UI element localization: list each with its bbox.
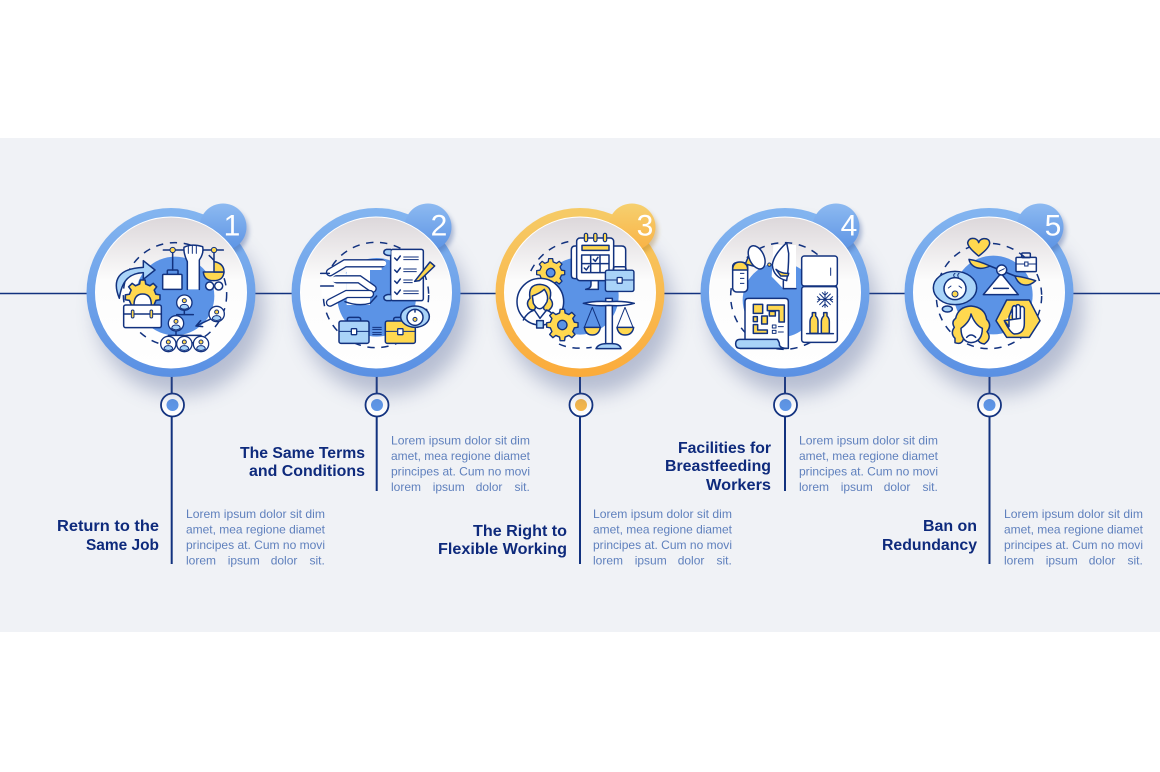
- text block 1: principes at. Cum no movi: [186, 538, 325, 552]
- icon: job return and hierarchy: [116, 243, 227, 352]
- text block 3: principes at. Cum no movi: [593, 538, 732, 552]
- text block 4: [799, 434, 939, 494]
- connector and node 4: [774, 370, 797, 491]
- text block 4: ipsum: [841, 480, 873, 494]
- text block 2: ipsum: [433, 480, 465, 494]
- heading 5: Redundancy: [882, 537, 977, 554]
- icon: breast pump, plan and fridge: [731, 243, 837, 349]
- text block 5: lorem: [1004, 554, 1034, 568]
- text block 2: [391, 434, 531, 494]
- heading 1: [57, 518, 159, 554]
- circle badge 5: 5: [1045, 210, 1061, 242]
- text block 1: dolor: [271, 554, 297, 568]
- text block 3: amet, mea regione diamet: [593, 522, 733, 536]
- text block 1: [186, 507, 326, 568]
- text block 1: amet, mea regione diamet: [186, 522, 326, 536]
- text block 4: principes at. Cum no movi: [799, 464, 938, 478]
- circle badge 2: 2: [431, 210, 447, 242]
- circle badge 1: 1: [224, 210, 240, 242]
- heading 3: [438, 523, 567, 558]
- text block 2: lorem: [391, 480, 421, 494]
- text block 4: dolor: [884, 480, 910, 494]
- connector and node 3: [570, 370, 592, 564]
- heading 1: Return to the: [57, 518, 159, 535]
- text block 1: ipsum: [228, 554, 260, 568]
- connector and node 1: [161, 370, 184, 564]
- heading 4: Breastfeeding: [665, 458, 771, 475]
- heading 4: Workers: [706, 477, 771, 494]
- text block 5: sit.: [1128, 554, 1143, 568]
- heading 2: [240, 445, 365, 480]
- timeline axis: [0, 292, 1160, 294]
- step 1: return to the same job: [57, 204, 326, 568]
- text block 5: [1004, 507, 1144, 568]
- text block 5: Lorem ipsum dolor sit dim: [1004, 507, 1143, 521]
- heading 5: Ban on: [923, 518, 977, 535]
- text block 4: amet, mea regione diamet: [799, 449, 939, 463]
- step 4: facilities for breastfeeding workers: [665, 204, 939, 494]
- icon: schedule, scales and gears: [517, 233, 634, 349]
- circle badge 5: [904, 204, 1082, 395]
- text block 3: [593, 507, 733, 568]
- text block 3: ipsum: [635, 554, 667, 568]
- text block 1: lorem: [186, 554, 216, 568]
- text block 2: Lorem ipsum dolor sit dim: [391, 434, 530, 448]
- text block 1: sit.: [310, 554, 325, 568]
- text block 5: amet, mea regione diamet: [1004, 522, 1144, 536]
- circle badge 2: [292, 204, 469, 395]
- text block 5: ipsum: [1046, 554, 1078, 568]
- heading 4: Facilities for: [678, 440, 771, 457]
- text block 2: sit.: [514, 480, 530, 494]
- circle badge 3: [496, 204, 673, 395]
- circle badge 3: 3: [637, 210, 653, 242]
- text block 4: Lorem ipsum dolor sit dim: [799, 434, 938, 448]
- text block 4: sit.: [922, 480, 938, 494]
- step 2: the same terms and conditions: [240, 204, 531, 494]
- connector and node 2: [366, 370, 388, 491]
- heading 3: Flexible Working: [438, 541, 567, 558]
- heading 2: The Same Terms: [240, 445, 365, 462]
- circle badge 4: [700, 204, 878, 395]
- step 3: the right to flexible working: [438, 204, 733, 568]
- circle badge 1: [86, 204, 264, 395]
- text block 2: amet, mea regione diamet: [391, 449, 531, 463]
- connector and node 5: [978, 370, 1001, 564]
- text block 3: sit.: [716, 554, 732, 568]
- background panel: [0, 138, 1160, 632]
- text block 3: Lorem ipsum dolor sit dim: [593, 507, 732, 521]
- text block 2: principes at. Cum no movi: [391, 464, 530, 478]
- text block 2: dolor: [476, 480, 502, 494]
- heading 4: [665, 440, 771, 494]
- heading 5: [882, 518, 977, 554]
- heading 2: and Conditions: [249, 463, 365, 480]
- icon: baby, balance, worried woman and stop hand: [933, 238, 1042, 349]
- step 5: ban on redundancy: [882, 204, 1144, 568]
- heading 1: Same Job: [86, 537, 159, 554]
- text block 1: Lorem ipsum dolor sit dim: [186, 507, 325, 521]
- text block 3: lorem: [593, 554, 623, 568]
- text block 4: lorem: [799, 480, 829, 494]
- text block 5: dolor: [1089, 554, 1115, 568]
- icon: hands, checklist and equal briefcases: [321, 242, 435, 348]
- text block 3: dolor: [678, 554, 704, 568]
- text block 5: principes at. Cum no movi: [1004, 538, 1143, 552]
- circle badge 4: 4: [841, 210, 857, 242]
- heading 3: The Right to: [473, 523, 567, 540]
